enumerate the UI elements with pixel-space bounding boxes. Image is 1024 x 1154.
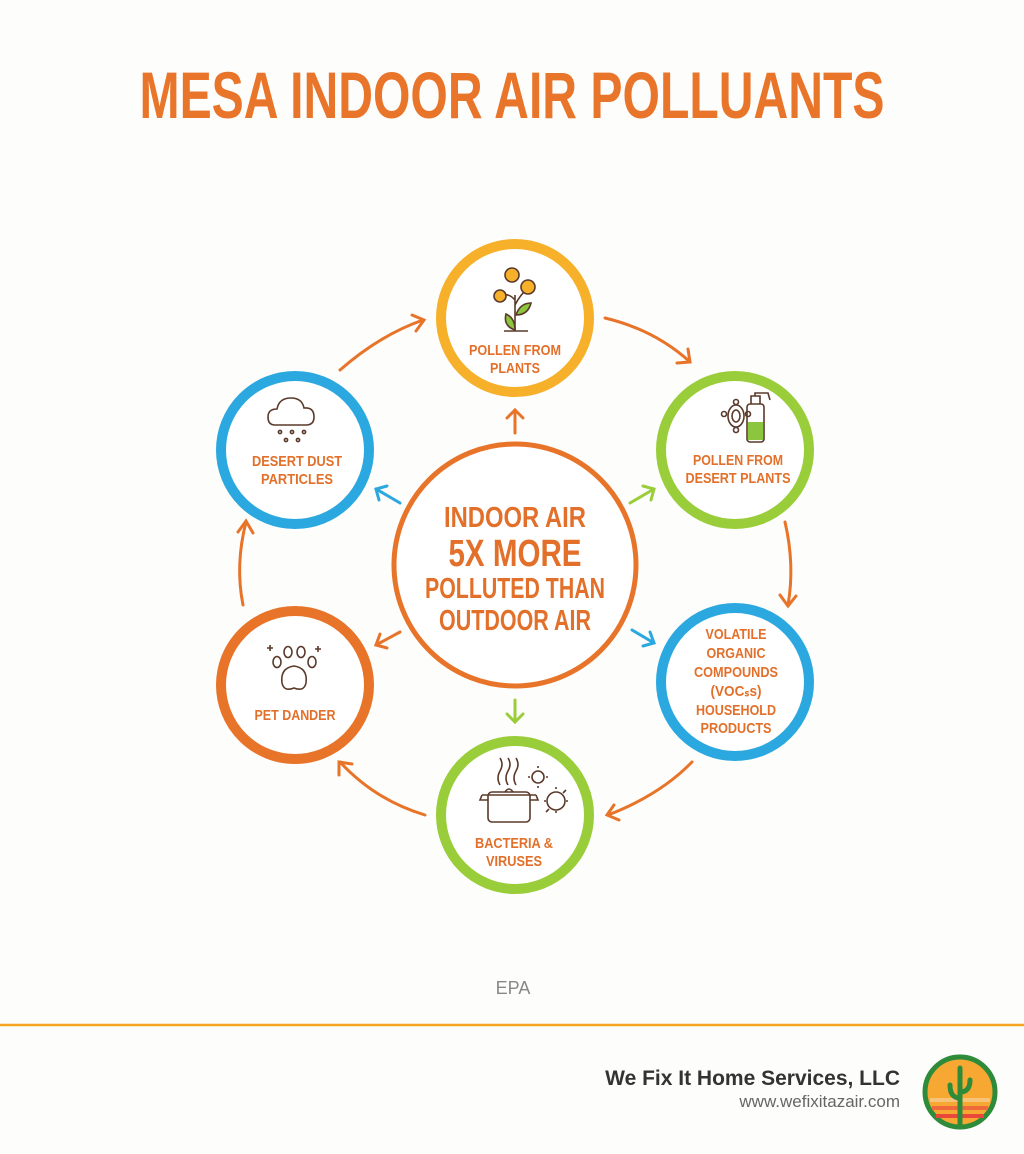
icon: logo cactus <box>925 1057 995 1127</box>
arrows: center spokes <box>376 410 654 722</box>
panel: desert dust particles: DESERT DUST <box>252 453 342 470</box>
panel: pollen from plants: PLANTS <box>490 360 540 377</box>
panel: VOCs: ORGANIC <box>706 645 766 662</box>
panel: VOCs: VOLATILE <box>706 626 766 643</box>
footer company text: We Fix It Home Services, LLC <box>605 1067 900 1090</box>
icon: molecule and spray bottle <box>722 393 770 442</box>
panel: VOCs: (VOCₛs) <box>710 683 762 700</box>
panel: VOCs: PRODUCTS <box>700 720 772 737</box>
footer company text <box>605 1067 900 1111</box>
footer company text: www.wefixitazair.com <box>738 1092 900 1111</box>
panel: VOCs: HOUSEHOLD <box>696 702 776 719</box>
panel: VOCs: COMPOUNDS <box>694 664 778 681</box>
center circle: 5X MORE <box>448 533 582 575</box>
icon: flower <box>494 268 535 331</box>
arrows: outer cycle <box>238 315 796 820</box>
panel: desert dust particles <box>221 376 369 524</box>
panel: pollen from plants: POLLEN FROM <box>469 342 561 359</box>
icon: pot and germs <box>480 758 568 822</box>
panel: pollen from desert plants <box>661 376 809 524</box>
center circle: INDOOR AIR <box>444 502 586 534</box>
source: EPA: EPA <box>496 978 530 998</box>
panel: pet dander: PET DANDER <box>254 707 336 724</box>
center circle: OUTDOOR AIR <box>439 605 591 637</box>
panel: pet dander <box>221 611 369 759</box>
panel: pollen from plants <box>441 244 589 392</box>
panel: bacteria & viruses: VIRUSES <box>486 853 542 870</box>
panel: bacteria & viruses: BACTERIA & <box>475 835 553 852</box>
center circle: POLLUTED THAN <box>425 573 605 605</box>
panel: pollen from desert plants: DESERT PLANTS <box>686 470 790 487</box>
center circle <box>394 444 636 686</box>
panel: VOCs <box>661 608 809 756</box>
panel: pollen from desert plants: POLLEN FROM <box>693 452 783 469</box>
panel: desert dust particles: PARTICLES <box>261 471 333 488</box>
icon: paw <box>267 645 321 689</box>
panel: bacteria & viruses <box>441 741 589 889</box>
icon: cloud with dust <box>268 398 314 442</box>
